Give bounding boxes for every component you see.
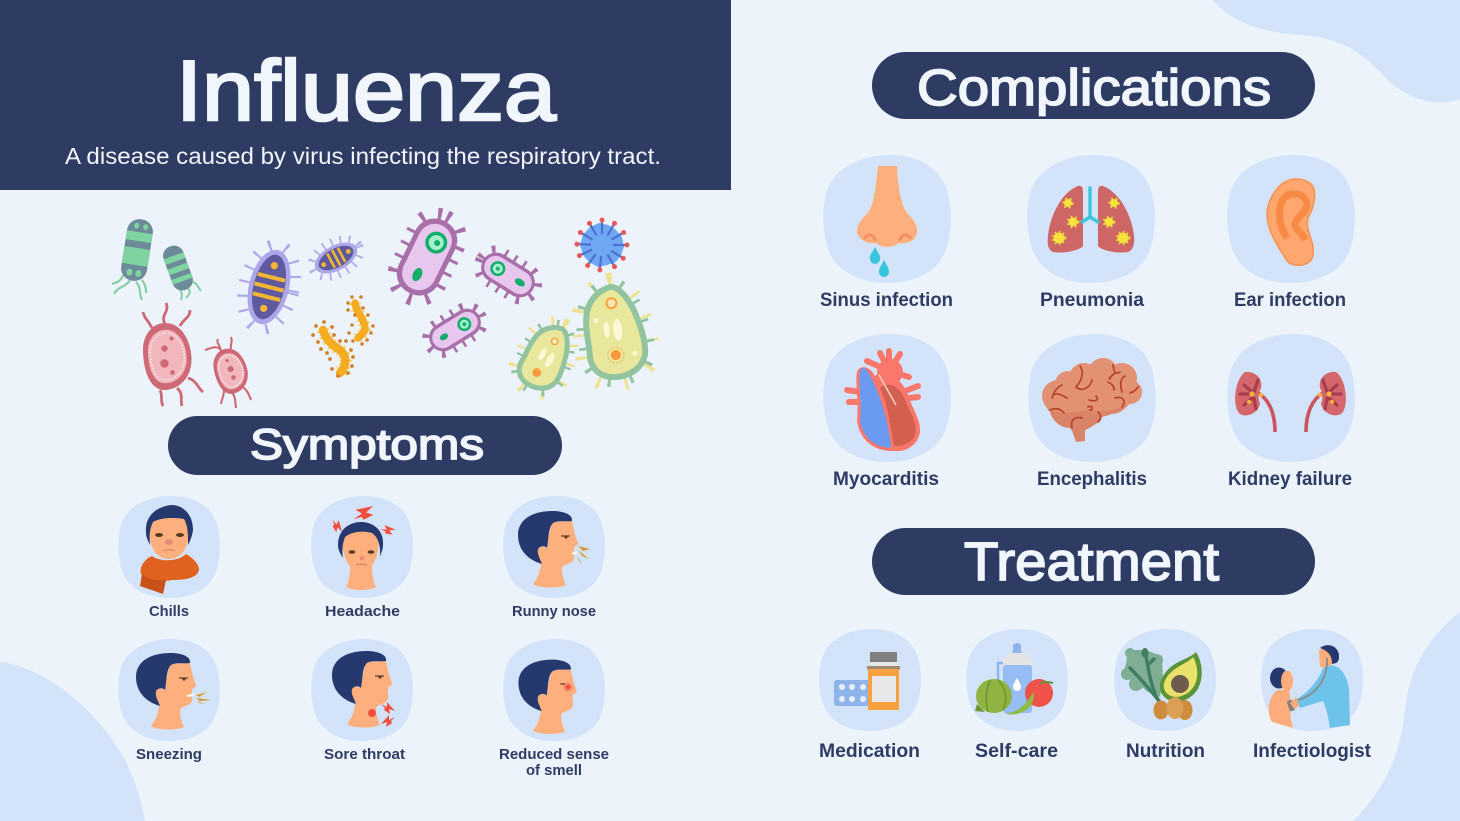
icon: man with headache (328, 499, 397, 590)
icon: kidneys (1235, 372, 1346, 432)
background blob: bottom right (1353, 612, 1460, 821)
icon: nose with drops (857, 166, 917, 277)
label: Kidney failure (1228, 468, 1352, 490)
subtitle: A disease caused by virus infecting the respiratory tract. (65, 143, 661, 169)
section heading: Complications (872, 52, 1315, 119)
label: of smell (526, 762, 582, 779)
section heading: Complications: Complications (917, 59, 1271, 116)
label: Medication (819, 740, 920, 762)
purple striped bacterium small (308, 234, 364, 282)
pink bacterium large (390, 211, 464, 303)
red bean bacterium small (205, 337, 251, 408)
icon: man with scarf (140, 505, 199, 594)
symptom: Sneezing (118, 639, 220, 763)
label: Pneumonia (1040, 289, 1144, 311)
label: Encephalitis (1037, 468, 1147, 490)
icon: brain (1042, 358, 1142, 442)
label: Sinus infection (820, 289, 953, 311)
green amoeba cell small (513, 319, 580, 396)
icon: man with runny nose (518, 511, 590, 588)
yellow squiggle bacterium large (311, 320, 355, 378)
red bean bacterium large (143, 303, 203, 406)
icon: pain bolts (328, 499, 397, 538)
icon: kale, avocado and nuts (1121, 648, 1202, 720)
label: Reduced sense (499, 746, 609, 763)
green amoeba cell large (583, 285, 647, 379)
symptom: Runny nose (503, 496, 605, 620)
icon: ear (1267, 179, 1315, 265)
complication: Encephalitis (1028, 334, 1156, 490)
background blob: bottom left (0, 662, 145, 821)
symptom: Headache (311, 496, 413, 620)
icon: man with sore throat (332, 651, 395, 728)
complication: Myocarditis (823, 334, 951, 490)
icon: water bottle and vegetables (975, 643, 1053, 714)
treatment: Nutrition (1114, 629, 1216, 762)
label: Myocarditis (833, 468, 939, 490)
title: Influenza (176, 44, 557, 139)
symptom: Sore throat (311, 639, 413, 763)
label: Headache (325, 603, 400, 620)
section heading: Symptoms: Symptoms (250, 421, 484, 469)
icon: man sneezing (136, 653, 212, 730)
label: Chills (149, 603, 189, 620)
icon: lungs (1048, 186, 1134, 253)
icon: heart (847, 351, 920, 451)
symptom: Chills (118, 496, 220, 620)
symptom: Reduced sense of smell (499, 639, 609, 779)
icon: pill bottle and blister (834, 652, 900, 710)
label: Infectiologist (1253, 740, 1371, 762)
section heading: Treatment (872, 528, 1315, 595)
complication: Pneumonia (1027, 155, 1155, 311)
label: Ear infection (1234, 289, 1346, 311)
yellow squiggle bacterium small (346, 295, 375, 346)
label: Runny nose (512, 603, 596, 620)
label: Sore throat (324, 746, 405, 763)
complication: Ear infection (1227, 155, 1355, 311)
label: Sneezing (136, 746, 202, 763)
label (499, 746, 609, 779)
illustration: viruses and bacteria cluster (112, 211, 647, 408)
treatment: Self-care (966, 629, 1068, 762)
pink bacterium lower (424, 303, 486, 357)
background blob: top right (1212, 0, 1460, 102)
label: Self-care (975, 740, 1058, 762)
pink bacterium middle (475, 247, 541, 303)
purple striped bacterium large (238, 243, 300, 331)
section heading: Treatment: Treatment (964, 532, 1219, 592)
header banner (0, 0, 731, 190)
treatment: Medication (819, 629, 921, 762)
icon: man with cheek spot (518, 660, 577, 734)
treatment: Infectiologist (1253, 629, 1371, 762)
label: Nutrition (1126, 740, 1205, 762)
green rod bacterium large (112, 217, 155, 300)
green rod bacterium small (160, 243, 201, 300)
complication: Sinus infection (820, 155, 953, 311)
blue virus (574, 218, 630, 273)
complication: Kidney failure (1227, 334, 1355, 490)
icon: doctor examining patient (1269, 645, 1350, 728)
section heading: Symptoms (168, 416, 562, 475)
